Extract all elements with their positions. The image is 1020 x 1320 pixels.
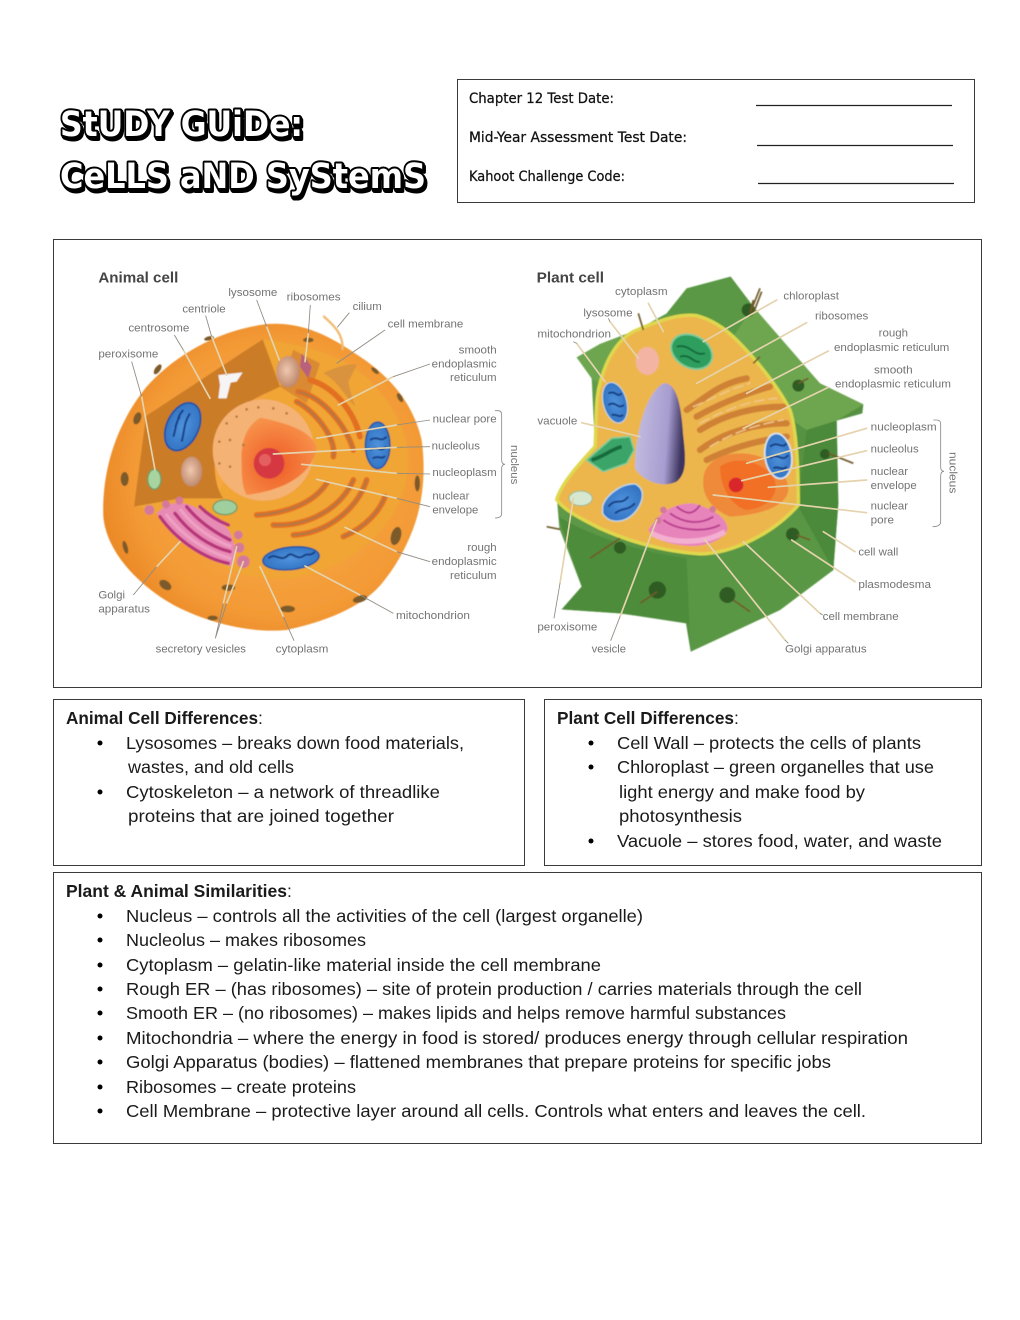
panel: plant and animal similarities [54, 872, 982, 1144]
golgi apparatus [144, 497, 250, 568]
plant cell labels: nuclear [871, 466, 908, 478]
leader lines [132, 300, 430, 641]
nucleus bracket [495, 411, 505, 518]
panel: plant and animal similarities: Rough ER – (has ribosomes) – site of protein production / carries materials through the cell [126, 979, 862, 999]
panel: plant cell differences [544, 700, 982, 866]
plant cell labels: envelope [871, 480, 917, 492]
animal cell labels: cell membrane [388, 318, 463, 330]
plant cell labels: ribosomes [815, 310, 869, 322]
animal cell labels: envelope [432, 504, 478, 516]
plant cell labels: pore [871, 514, 894, 526]
plant cell labels: chloroplast [783, 290, 840, 302]
panel: plant and animal similarities: Nucleolus – makes ribosomes [126, 930, 366, 950]
animal cell labels: nucleolus [432, 440, 480, 452]
title: CeLLS aND SyStemS [60, 157, 426, 197]
plant cell labels [537, 271, 958, 655]
plant cell labels: cell membrane [823, 611, 899, 623]
animal cell labels: centriole [182, 304, 226, 316]
panel: plant and animal similarities: Cell Membrane – protective layer around all cells. Controls what enters and leaves the cell. [126, 1101, 866, 1121]
plant cell labels: smooth [874, 364, 913, 376]
plant cell labels: plasmodesma [858, 579, 932, 591]
panel: plant and animal similarities: Smooth ER – (no ribosomes) – makes lipids and helps remove harmful substances [126, 1003, 786, 1023]
panel: test dates: Mid-Year Assessment Test Date: [469, 130, 687, 146]
plant cell labels: rough [879, 328, 908, 340]
plant cell labels: nucleus [946, 452, 958, 494]
panel: plant cell differences: Chloroplast – green organelles that use [617, 757, 934, 777]
animal cell labels: Golgi [98, 589, 125, 601]
panel: animal cell differences: : [258, 708, 263, 728]
plant cell labels: vesicle [592, 643, 626, 655]
smooth and rough ER stacks [257, 364, 385, 537]
panel: animal cell differences: Animal Cell Differences [66, 708, 258, 728]
vacuole [635, 383, 685, 484]
animal cell labels: apparatus [98, 604, 150, 616]
panel: plant and animal similarities: Cytoplasm – gelatin-like material inside the cell membrane [126, 955, 601, 975]
leader lines [554, 300, 867, 643]
animal cell labels: reticulum [450, 372, 497, 384]
panel: test dates: Chapter 12 Test Date: [469, 91, 614, 107]
animal cell labels: mitochondrion [396, 610, 470, 622]
plant cell labels: peroxisome [537, 621, 597, 633]
animal cell labels: cilium [353, 301, 382, 313]
title: StUDY GUiDe: [60, 105, 303, 145]
animal cell labels: endoplasmic [432, 556, 497, 568]
cilium [323, 316, 343, 350]
animal cell labels: centrosome [128, 323, 189, 335]
panel: plant cell differences: photosynthesis [619, 806, 742, 826]
panel: test dates [458, 80, 974, 202]
panel: animal cell differences: wastes, and old cells [127, 757, 294, 777]
plant cell labels: Plant cell [537, 271, 604, 287]
plant cell labels: nuclear [871, 500, 908, 512]
lysosome and peroxisome [569, 347, 659, 506]
animal cell labels: peroxisome [98, 349, 158, 361]
animal cell labels: lysosome [228, 287, 277, 299]
chloroplasts [587, 327, 718, 472]
plant cell labels: endoplasmic reticulum [835, 378, 951, 390]
panel: cell diagrams [54, 240, 982, 688]
panel: plant and animal similarities: Mitochondria – where the energy in food is stored/ produces energy through cellular respiration [126, 1028, 908, 1048]
panel: plant cell differences: Cell Wall – protects the cells of plants [617, 733, 921, 753]
animal cell labels: nuclear [432, 490, 470, 502]
plant cell labels: nucleoplasm [871, 422, 937, 434]
plant cell labels: cell wall [858, 547, 898, 559]
mitochondria [157, 397, 390, 573]
panel: plant cell differences: Plant Cell Differences [557, 708, 734, 728]
nuclear pores [218, 406, 288, 468]
panel: animal cell differences: Lysosomes – breaks down food materials, [126, 733, 464, 753]
animal cell labels [98, 271, 520, 655]
animal cell labels: nucleus [508, 445, 520, 485]
golgi apparatus [648, 503, 727, 546]
panel: plant cell differences: : [734, 708, 739, 728]
plant cell labels: vacuole [537, 415, 577, 427]
plant cell labels: nucleolus [871, 444, 919, 456]
ER [687, 378, 787, 460]
mitochondria [598, 380, 795, 521]
animal cell labels: rough [467, 542, 497, 554]
animal cell labels: reticulum [450, 570, 497, 582]
animal cell labels: ribosomes [287, 292, 341, 304]
panel: plant and animal similarities: Plant & Animal Similarities [66, 881, 287, 901]
animal cell labels: smooth [459, 344, 497, 356]
panel: plant and animal similarities: : [287, 881, 292, 901]
animal cell labels: nucleoplasm [432, 467, 497, 479]
panel: plant and animal similarities: Golgi Apparatus (bodies) – flattened membranes that prepare proteins for specific jobs [126, 1052, 831, 1072]
wall pits [547, 288, 853, 612]
plant cell labels: lysosome [583, 308, 633, 320]
animal cell labels: endoplasmic [432, 358, 497, 370]
panel: plant cell differences: Vacuole – stores food, water, and waste [617, 831, 942, 851]
nucleus bracket [933, 420, 944, 527]
plant cell labels: mitochondrion [537, 328, 611, 340]
panel: animal cell differences: Cytoskeleton – a network of threadlike [126, 782, 440, 802]
vesicles and peroxisome [148, 353, 312, 515]
animal cell labels: nuclear pore [433, 414, 497, 426]
plant cell labels: cytoplasm [615, 286, 668, 298]
animal cell diagram [98, 271, 520, 655]
animal cell labels: Animal cell [98, 271, 178, 287]
panel: animal cell differences [54, 700, 524, 866]
title [60, 105, 426, 197]
nucleus [703, 453, 788, 517]
panel: plant and animal similarities: Nucleus – controls all the activities of the cell (largest organelle) [126, 906, 643, 926]
plant cell diagram [537, 271, 958, 655]
panel: animal cell differences: proteins that are joined together [128, 806, 394, 826]
plant cell labels: endoplasmic reticulum [834, 342, 949, 354]
animal cell labels: secretory vesicles [156, 643, 246, 655]
plant cell labels: Golgi apparatus [785, 643, 867, 655]
panel: plant cell differences: light energy and make food by [619, 782, 865, 802]
panel: plant and animal similarities: Ribosomes – create proteins [126, 1077, 356, 1097]
panel: test dates: Kahoot Challenge Code: [469, 169, 625, 185]
animal cell labels: cytoplasm [276, 643, 328, 655]
centriole [218, 372, 243, 398]
